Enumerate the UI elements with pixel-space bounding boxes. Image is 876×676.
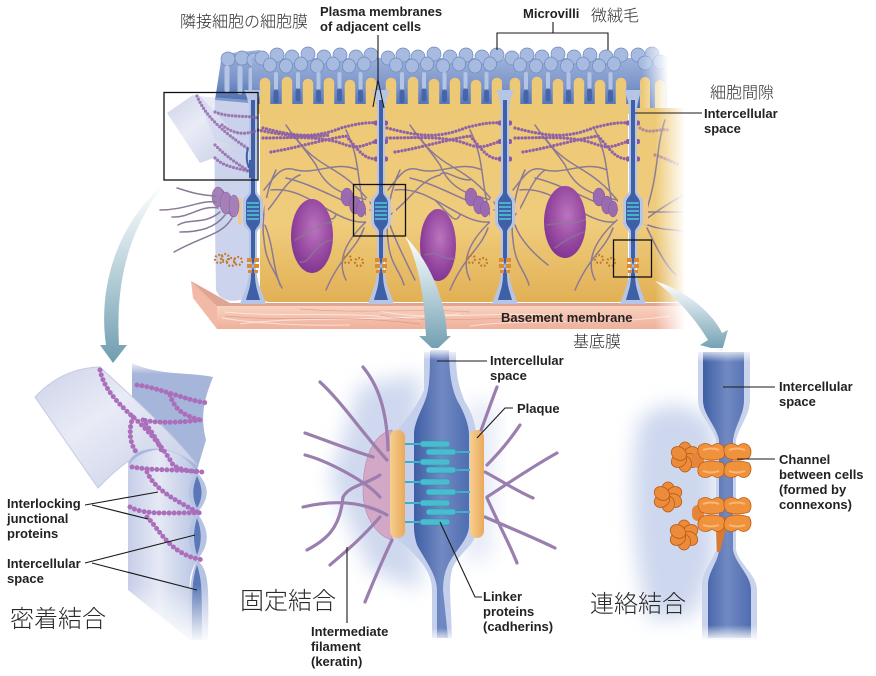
labels: Interlocking <box>7 496 81 511</box>
panel: gap junction detail <box>590 348 864 641</box>
labels: (keratin) <box>311 654 362 669</box>
labels: Channel <box>779 452 830 467</box>
labels: (cadherins) <box>483 619 553 634</box>
labels: junctional <box>6 511 68 526</box>
panel: epithelial cell layer <box>160 44 710 336</box>
soft cell background <box>633 406 715 620</box>
villi and cells <box>252 47 690 302</box>
labels: connexons) <box>779 497 852 512</box>
arrow: to gap junction <box>655 281 728 351</box>
plaques <box>390 430 405 538</box>
leader lines <box>723 387 775 459</box>
linker proteins <box>405 441 470 525</box>
cell 4 <box>630 47 690 302</box>
connexon rings <box>652 442 701 550</box>
title: gap junction: 連絡結合 <box>590 591 686 618</box>
left cell (cut open) <box>215 50 261 301</box>
left-cell filaments and junction <box>160 187 242 265</box>
title: tight junction: 密着結合 <box>10 606 106 633</box>
labels <box>311 353 564 669</box>
label: intercellular space (jp): 細胞間隙 <box>710 84 774 102</box>
labels: (formed by <box>779 482 847 497</box>
junctional protein strands <box>100 370 207 560</box>
nuclei <box>291 186 586 281</box>
panel: desmosome detail <box>240 348 564 669</box>
label: plasma membranes: of adjacent cells <box>320 19 421 34</box>
labels: Plaque <box>517 401 560 416</box>
leader lines <box>347 361 513 623</box>
plaque backing <box>363 430 392 540</box>
arrow: to desmosome <box>405 236 451 351</box>
folded flap <box>35 367 197 488</box>
labels: space <box>779 394 816 409</box>
labels: between cells <box>779 467 864 482</box>
zoom box: gap junction <box>614 240 652 277</box>
soft cell background <box>330 375 420 590</box>
labels: Intermediate <box>311 624 388 639</box>
labels: proteins <box>7 526 58 541</box>
labels: space <box>7 571 44 586</box>
cell column <box>120 360 220 643</box>
top labels <box>180 4 778 351</box>
label: plasma membranes: Plasma membranes <box>320 4 442 19</box>
channel connexons <box>692 444 751 552</box>
zoom box content: tight junction flap <box>167 95 258 178</box>
labels: filament <box>311 639 362 654</box>
label: adjacent plasma membranes (jp): 隣接細胞の細胞膜 <box>180 13 308 31</box>
right fade <box>642 44 710 336</box>
tube <box>695 348 761 641</box>
leader lines <box>85 492 197 590</box>
labels: proteins <box>483 604 534 619</box>
filaments <box>303 367 557 602</box>
labels <box>779 379 864 512</box>
basement membrane <box>191 281 690 329</box>
label: microvilli (jp): 微絨毛 <box>591 7 639 25</box>
arrow: to tight junction <box>100 182 166 363</box>
cell 1 <box>252 47 382 302</box>
zoom box: desmosome <box>354 184 406 236</box>
label: plasma membranes <box>320 4 442 34</box>
panel: tight junction detail <box>6 360 220 643</box>
labels: Intercellular <box>779 379 853 394</box>
intercellular gaps <box>213 90 648 304</box>
label: intercellular space: space <box>704 121 741 136</box>
title: desmosome: 固定結合 <box>240 588 336 615</box>
zoom box: tight junction <box>164 92 258 180</box>
label: intercellular space: Intercellular <box>704 106 778 121</box>
label: basement membrane (jp): 基底膜 <box>573 333 621 351</box>
label: basement membrane: Basement membrane <box>501 310 632 325</box>
label: microvilli: Microvilli <box>523 6 579 21</box>
cell 3 <box>502 47 632 302</box>
leader lines <box>373 22 702 113</box>
labels: space <box>490 368 527 383</box>
cell 2 <box>378 47 508 302</box>
tight junction strands <box>258 120 680 165</box>
labels: Linker <box>483 589 522 604</box>
intercellular tube <box>396 348 476 642</box>
intermediate filaments <box>263 120 684 290</box>
labels <box>6 496 81 586</box>
label: intercellular space <box>704 106 778 136</box>
labels: Intercellular <box>7 556 81 571</box>
labels: Intercellular <box>490 353 564 368</box>
